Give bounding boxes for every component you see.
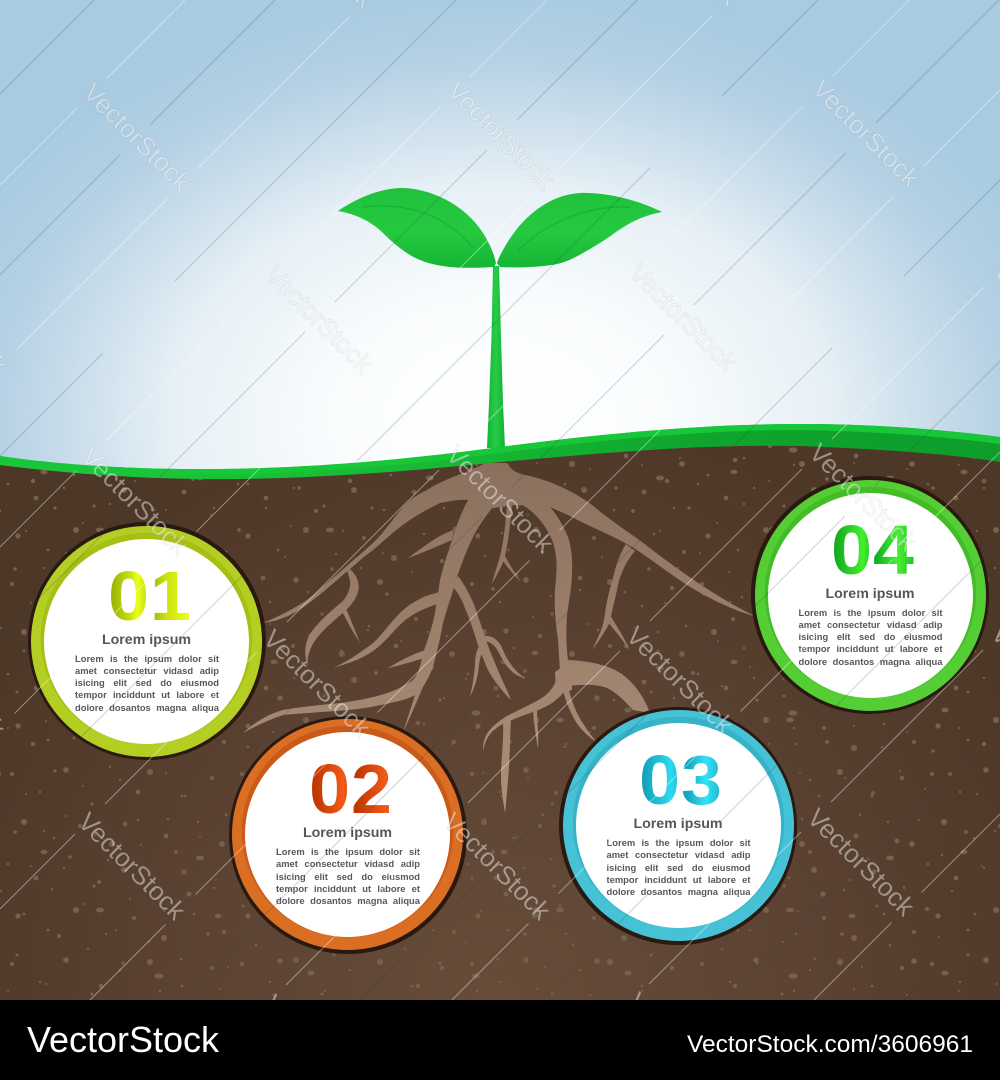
repeated VectorStock watermarks: VectorStock [803, 437, 923, 557]
central root lower-left branch [243, 679, 420, 733]
repeated VectorStock watermarks: VectorStock [259, 259, 379, 379]
panel 02 [229, 716, 467, 954]
text 02 [276, 846, 420, 906]
right leaf [497, 193, 662, 267]
number 04 [748, 520, 998, 580]
central root mid-left branch [333, 592, 440, 668]
title 04: Lorem ipsum [825, 586, 915, 602]
text 02: isicing elit sed do eiusmod [276, 870, 420, 882]
central root right branch [452, 576, 511, 700]
number 01: 01 [108, 557, 191, 635]
left main root [263, 463, 490, 623]
lower-left branch of right root [483, 680, 568, 751]
root crown [468, 463, 552, 508]
number 03: 03 [639, 741, 723, 819]
text 03: isicing elit sed do eiusmod [606, 862, 750, 872]
text 03: amet consectetur vidasd adip [606, 849, 750, 860]
repeated VectorStock watermarks: VectorStock [806, 73, 926, 193]
text 04: dolore dosantos magna aliqua [798, 656, 942, 666]
repeated VectorStock watermarks: VectorStock [620, 620, 740, 740]
text 02: Lorem is the ipsum dolor sit [276, 846, 420, 857]
short down twig [533, 708, 538, 749]
number 01 [25, 566, 274, 626]
text 04: Lorem is the ipsum dolor sit [798, 606, 942, 618]
plant stem [487, 266, 505, 448]
repeated VectorStock watermarks: VectorStock [801, 802, 921, 922]
panel 04 [751, 476, 989, 714]
text 03: tempor inciddunt ut labore et [606, 874, 750, 885]
roots [243, 463, 757, 813]
crown middle sub-twig [502, 556, 521, 582]
hanging branch twig [606, 615, 630, 651]
number 04: 04 [831, 511, 915, 589]
footer logo: VectorStock [27, 1019, 220, 1060]
central root lower-left twig [388, 650, 426, 668]
left leaf [338, 188, 496, 268]
text 04 [798, 606, 943, 667]
repeated VectorStock watermarks: VectorStock [72, 806, 192, 926]
soil [0, 430, 1000, 1000]
long down twig [501, 718, 511, 813]
right descending root with arc [517, 503, 650, 713]
right branch right twig [484, 636, 525, 678]
central root [403, 500, 493, 732]
text 04: isicing elit sed do eiusmod [798, 631, 942, 642]
repeated VectorStock watermarks: VectorStock [77, 77, 197, 197]
text 02: tempor inciddunt ut labore et [276, 883, 420, 894]
title 01: Lorem ipsum [102, 632, 191, 648]
title 03: Lorem ipsum [633, 816, 723, 832]
text 01: isicing elit sed do eiusmod [75, 677, 219, 688]
text 01: tempor inciddunt ut labore et [75, 689, 219, 700]
text 01: Lorem is the ipsum dolor sit [75, 652, 219, 664]
arc junction filler [555, 660, 572, 695]
repeated VectorStock watermarks: VectorStock [75, 441, 195, 561]
text 04: amet consectetur vidasd adip [798, 619, 942, 630]
down-right twig [562, 686, 598, 743]
right branch left twig [470, 642, 485, 697]
repeated VectorStock watermarks: VectorStock [437, 806, 557, 926]
text 03 [606, 837, 751, 897]
number 02: 02 [309, 750, 392, 828]
repeated VectorStock watermarks: VectorStock [257, 623, 377, 743]
footer bar [0, 1000, 1000, 1080]
ground grass band [0, 424, 1000, 479]
left root sub-twig [341, 606, 360, 643]
right main root [500, 463, 757, 617]
text 01: dolore dosantos magna aliqua [75, 702, 219, 712]
text 01: amet consectetur vidasd adip [75, 665, 219, 676]
repeated VectorStock watermarks: VectorStock [440, 439, 560, 559]
title 02: Lorem ipsum [303, 825, 392, 841]
central root upper-left twig [408, 530, 454, 558]
repeated VectorStock watermarks: VectorStock [441, 75, 561, 195]
text 02: dolore dosantos magna aliqua [276, 895, 420, 906]
text 02: amet consectetur vidasd adip [276, 858, 420, 869]
footer image id: VectorStock.com/3606961 [687, 1031, 973, 1058]
text 04: tempor inciddunt ut labore et [798, 643, 942, 654]
text 03: Lorem is the ipsum dolor sit [606, 837, 750, 848]
number 03 [556, 750, 806, 810]
panel 03 [559, 707, 797, 945]
sky background [0, 0, 1000, 480]
text 01 [75, 652, 220, 713]
left root sub-branch [305, 566, 359, 667]
right root hanging branch [592, 544, 635, 650]
panel 01 [28, 522, 266, 760]
crown middle twig [492, 505, 512, 584]
number 02 [226, 759, 475, 819]
repeated VectorStock watermarks: VectorStock [623, 257, 743, 377]
text 03: dolore dosantos magna aliqua [606, 886, 750, 897]
